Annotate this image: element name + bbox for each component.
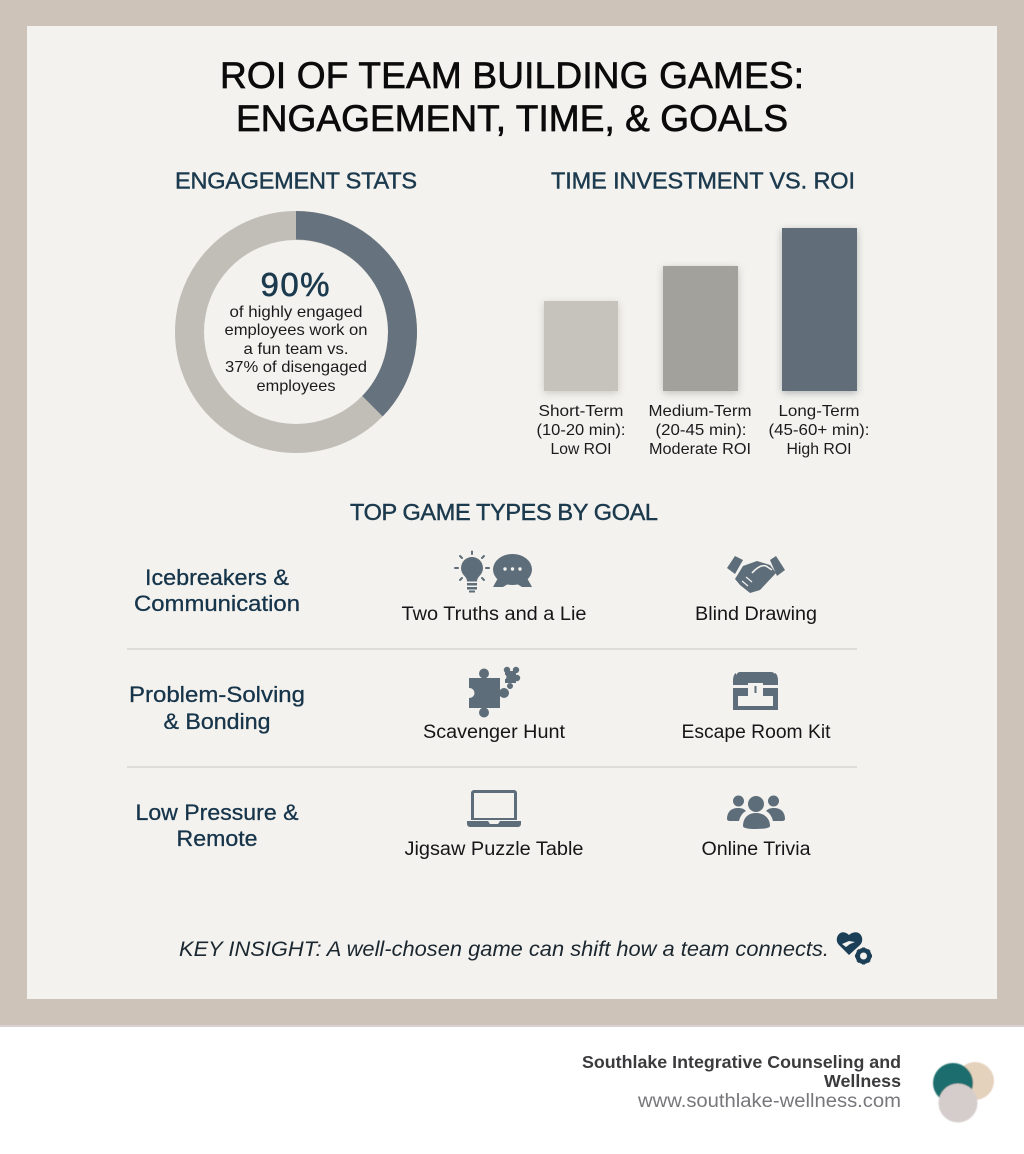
bar: medium-term [663, 266, 738, 391]
bar label: long-term: High ROI [786, 441, 852, 458]
bar label: medium-term: Moderate ROI [649, 441, 751, 458]
icon: lightbulb and speech bubble [455, 552, 532, 592]
bar label: long-term [768, 403, 870, 458]
icon: heart and gear [837, 932, 872, 964]
row label: low pressure and remote: Remote [176, 826, 258, 851]
icon: treasure chest [733, 672, 778, 710]
icon: puzzle pieces [464, 667, 520, 718]
donut caption: employees [256, 378, 336, 395]
footer: organisation details: www.southlake-wellness.com [637, 1091, 901, 1112]
title: ROI OF TEAM BUILDING GAMES: [220, 55, 804, 96]
bar label: medium-term: (20-45 min): [656, 422, 746, 439]
row label: problem-solving and bonding: & Bonding [164, 709, 270, 734]
row label: problem-solving and bonding: Problem-Solving [129, 682, 305, 707]
donut caption: employees work on [224, 322, 368, 339]
label: escape room kit: Escape Room Kit [682, 722, 831, 743]
heading: engagement stats: ENGAGEMENT STATS [175, 168, 417, 194]
row label: icebreakers and communication [134, 565, 300, 616]
key insight: KEY INSIGHT: A well-chosen game can shift how a team connects. [179, 937, 829, 961]
bar label: short-term: Low ROI [550, 441, 612, 458]
panel: infographic card [27, 26, 997, 999]
bar label: medium-term [648, 403, 752, 458]
heading: time investment vs ROI: TIME INVESTMENT VS. ROI [551, 168, 855, 194]
label: two truths and a lie: Two Truths and a Lie [402, 604, 586, 625]
donut caption: of highly engaged [230, 304, 362, 321]
bar: short-term [544, 301, 618, 391]
footer: organisation details: Wellness [824, 1071, 901, 1091]
bar label: short-term: (10-20 min): [536, 422, 626, 439]
label: online trivia: Online Trivia [702, 839, 811, 860]
label: blind drawing: Blind Drawing [695, 604, 817, 625]
bar: long-term [782, 228, 857, 391]
icon: handshake [727, 556, 785, 593]
footer: organisation details: Southlake Integrative Counseling and [582, 1052, 901, 1072]
donut caption [224, 304, 368, 395]
row label: icebreakers and communication: Communication [134, 591, 300, 616]
row label: icebreakers and communication: Icebreakers & [145, 565, 289, 590]
bar chart: time investment vs ROI [536, 228, 870, 458]
title [220, 55, 804, 139]
donut caption: 37% of disengaged [225, 359, 367, 376]
donut caption: a fun team vs. [244, 341, 348, 358]
donut chart: engagement [190, 211, 417, 438]
donut value: 90% [260, 266, 330, 303]
row label: low pressure and remote [136, 800, 298, 851]
bar label: short-term [536, 403, 626, 458]
label: scavenger hunt: Scavenger Hunt [423, 722, 566, 743]
icon: people group [727, 796, 785, 829]
bar label: long-term: Long-Term [778, 403, 860, 420]
bar label: short-term: Short-Term [538, 403, 624, 420]
label: jigsaw puzzle table: Jigsaw Puzzle Table [404, 839, 584, 860]
heading: top game types by goal: TOP GAME TYPES BY GOAL [350, 499, 658, 525]
title: ENGAGEMENT, TIME, & GOALS [236, 98, 788, 139]
row label: low pressure and remote: Low Pressure & [136, 800, 298, 825]
row label: problem-solving and bonding [129, 682, 305, 734]
bar label: long-term: (45-60+ min): [768, 422, 870, 439]
icon: laptop [467, 790, 521, 827]
footer: organisation details [582, 1052, 901, 1112]
footer logo [933, 1062, 994, 1122]
bar label: medium-term: Medium-Term [648, 403, 752, 420]
